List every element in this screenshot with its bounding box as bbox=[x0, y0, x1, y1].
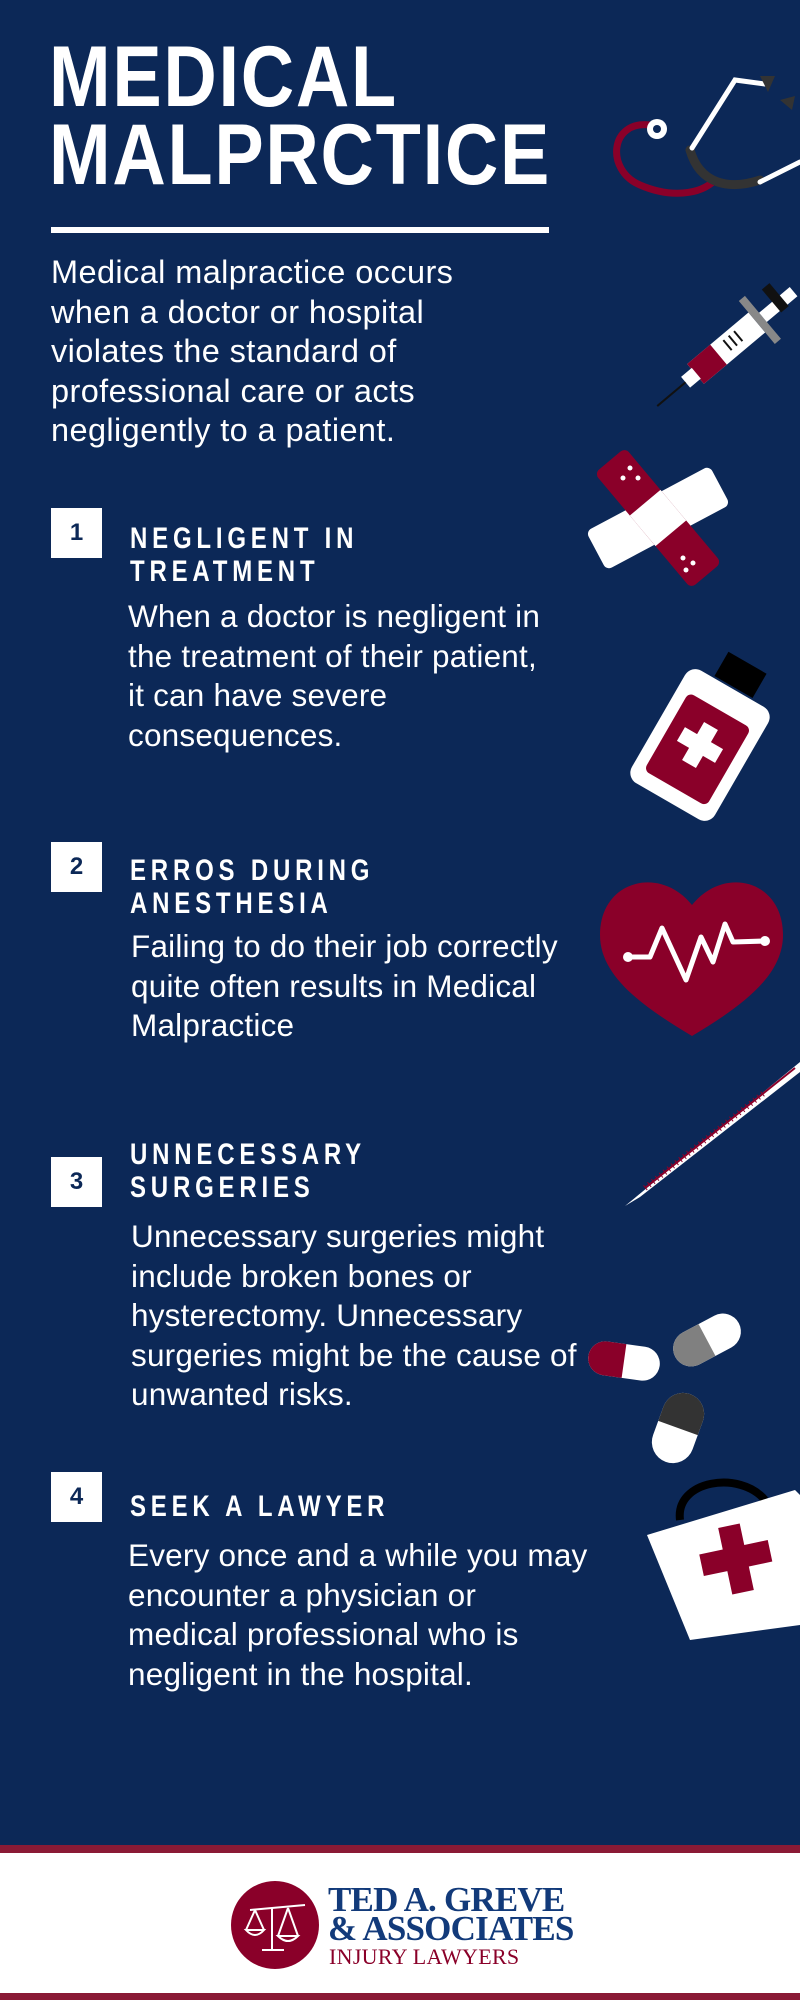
body 3: surgeries might be the cause of bbox=[131, 1336, 577, 1372]
body 2: quite often results in Medical bbox=[131, 968, 536, 1004]
icon: stethoscope bbox=[617, 76, 800, 193]
item 4 bbox=[51, 1472, 588, 1692]
body 1: the treatment of their patient, bbox=[128, 638, 537, 674]
number 1 bbox=[51, 508, 102, 558]
intro text: violates the standard of bbox=[51, 333, 397, 369]
body 2: Failing to do their job correctly bbox=[131, 928, 558, 964]
body 4 bbox=[128, 1537, 588, 1692]
body 3: Unnecessary surgeries might bbox=[131, 1218, 544, 1254]
icon: bandage bbox=[586, 448, 730, 588]
heading 1: NEGLIGENT IN bbox=[130, 522, 358, 555]
body 1: When a doctor is negligent in bbox=[128, 598, 540, 634]
body 2: Malpractice bbox=[131, 1007, 294, 1043]
item 3 bbox=[51, 1138, 577, 1412]
heading 2 bbox=[130, 854, 374, 920]
body 4: Every once and a while you may bbox=[128, 1537, 588, 1573]
icon: medical kit bbox=[647, 1483, 800, 1640]
icon: medicine bottle bbox=[626, 639, 789, 825]
logo text: TED A. GREVE bbox=[328, 1880, 564, 1919]
footer: INJURY LAWYERS bbox=[329, 1944, 519, 1969]
body 1: it can have severe bbox=[128, 677, 387, 713]
logo text: & ASSOCIATES bbox=[328, 1909, 574, 1948]
body 2 bbox=[131, 928, 558, 1043]
number 2 bbox=[51, 842, 102, 892]
intro text: professional care or acts bbox=[51, 372, 415, 408]
body 1: consequences. bbox=[128, 716, 343, 752]
intro text: Medical malpractice occurs bbox=[51, 254, 453, 290]
body 3: unwanted risks. bbox=[131, 1376, 353, 1412]
intro text bbox=[51, 254, 453, 448]
body 4: medical professional who is bbox=[128, 1616, 519, 1652]
title: MALPRCTICE bbox=[49, 107, 551, 203]
heading 2: ERROS DURING bbox=[130, 854, 374, 887]
intro text: negligently to a patient. bbox=[51, 412, 395, 448]
number 4 bbox=[51, 1472, 102, 1522]
number 2: 2 bbox=[70, 853, 83, 880]
heading 3: SURGERIES bbox=[130, 1171, 315, 1204]
number 1: 1 bbox=[70, 519, 83, 546]
intro text: when a doctor or hospital bbox=[51, 294, 424, 330]
heading 1 bbox=[130, 522, 358, 588]
icon: thermometer bbox=[625, 1062, 800, 1206]
body 1 bbox=[128, 598, 540, 752]
title bbox=[49, 29, 551, 203]
body 4: encounter a physician or bbox=[128, 1576, 476, 1612]
number 4: 4 bbox=[70, 1483, 83, 1510]
body 4: negligent in the hospital. bbox=[128, 1656, 473, 1692]
icon: heart with heartbeat bbox=[600, 882, 783, 1036]
heading 2: ANESTHESIA bbox=[130, 887, 333, 920]
heading 3: UNNECESSARY bbox=[130, 1138, 366, 1171]
title: MEDICAL bbox=[49, 29, 398, 125]
logo text bbox=[328, 1880, 574, 1948]
heading 4: SEEK A LAWYER bbox=[130, 1490, 389, 1523]
number 3: 3 bbox=[70, 1168, 83, 1195]
logo: scales circle bbox=[231, 1881, 319, 1969]
icon: syringe bbox=[639, 270, 800, 428]
number 3 bbox=[51, 1157, 102, 1207]
heading 1: TREATMENT bbox=[130, 555, 319, 588]
body 3 bbox=[131, 1218, 577, 1412]
footer bbox=[0, 1845, 800, 2000]
body 3: hysterectomy. Unnecessary bbox=[131, 1297, 522, 1333]
body 3: include broken bones or bbox=[131, 1258, 472, 1294]
heading 3 bbox=[130, 1138, 366, 1204]
item 2 bbox=[51, 842, 558, 1043]
icon: pills bbox=[586, 1307, 747, 1469]
item 1 bbox=[51, 508, 540, 752]
